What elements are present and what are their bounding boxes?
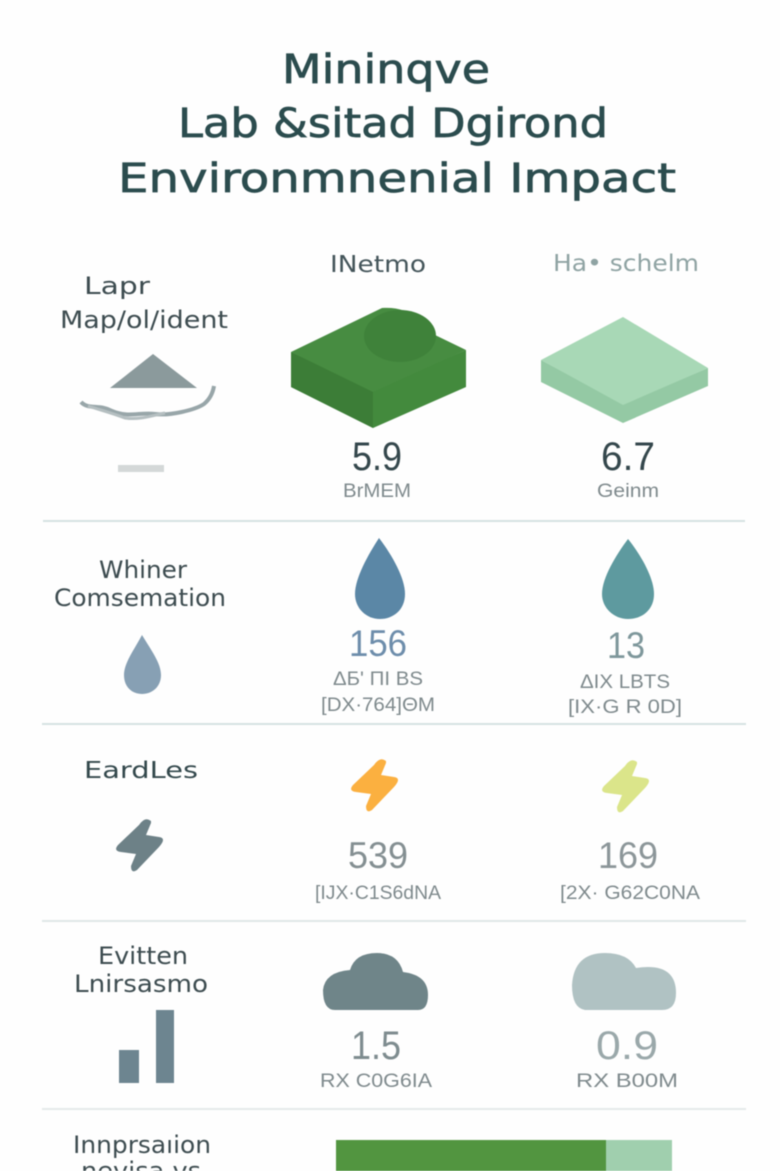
- stat: mined energy: 539: [348, 835, 408, 876]
- panel: impression row: [73, 1131, 672, 1171]
- row label: water: [54, 556, 226, 612]
- panel: water row: [54, 538, 682, 718]
- stat: mined water: [DX·764]ΘM: [321, 695, 435, 716]
- bar: share comparison: [336, 1140, 672, 1171]
- icon: small bolt: [116, 819, 163, 871]
- row label: impression: [73, 1131, 211, 1171]
- stat: lab water: 13: [607, 625, 645, 666]
- stat: lab water: [568, 625, 682, 718]
- icon: lab-grown land block: [541, 317, 708, 423]
- row label: emissions: Evitten: [98, 942, 188, 970]
- stat: lab emissions: 0.9: [596, 1024, 658, 1068]
- stat: lab water: [IX·G R 0D]: [568, 697, 682, 718]
- stat: lab land: 6.7: [601, 435, 655, 479]
- stat: mined emissions: [320, 1024, 432, 1092]
- icon: mountain and land: [81, 354, 214, 472]
- stat: lab emissions: [576, 1024, 678, 1092]
- stat: lab land: [597, 435, 659, 502]
- stat: mined water: 156: [349, 623, 407, 664]
- icon: mined water drop: [355, 538, 405, 619]
- icon: water drop small: [124, 635, 161, 694]
- stat: mined water: [321, 623, 435, 716]
- stat: lab water: ΔIX LBTS: [580, 672, 670, 693]
- divider: [42, 723, 746, 725]
- panel: energy row: [84, 758, 700, 904]
- title: Lab &sitad Dgirond: [178, 101, 608, 147]
- row label: impression: Innprsaıion: [73, 1131, 211, 1159]
- column heading: mined: INetmo: [330, 252, 426, 278]
- stat: mined water: ΔБ' ΠI ΒS: [333, 669, 423, 690]
- divider: [43, 520, 745, 522]
- row label: water: Comsemation: [54, 584, 226, 612]
- stat: lab emissions: RX B00M: [576, 1071, 678, 1092]
- stat: lab energy: [2X· G62C0NA: [560, 883, 700, 904]
- divider: [42, 920, 746, 922]
- icon: lab energy bolt: [602, 760, 649, 812]
- row label: land: [60, 272, 228, 334]
- stat: mined land: 5.9: [352, 435, 402, 479]
- stat: mined emissions: 1.5: [351, 1024, 401, 1068]
- panel: land row: [60, 272, 708, 502]
- stat: lab land: Geinm: [597, 481, 659, 502]
- icon: lab cloud: [572, 953, 676, 1010]
- row label: land: Map/ol/ident: [60, 306, 228, 334]
- title: Environmnenial Impact: [118, 156, 676, 202]
- column heading: lab-grown: Ha• schelm: [553, 251, 699, 277]
- stat: mined land: [343, 435, 411, 502]
- row label: water: Whiner: [99, 556, 187, 584]
- divider: [42, 1108, 746, 1110]
- stat: mined land: BrMEM: [343, 481, 411, 502]
- title: [118, 47, 676, 202]
- row label: land: Lapr: [84, 272, 150, 300]
- stat: lab energy: 169: [598, 835, 658, 876]
- row label: energy: EardLes: [84, 758, 198, 784]
- title: Mininqve: [282, 47, 490, 93]
- row label: emissions: [74, 942, 208, 998]
- icon: bars: [119, 1010, 174, 1083]
- row label: emissions: Lnirsasmo: [74, 970, 208, 998]
- icon: mined energy bolt: [351, 759, 398, 811]
- stat: mined emissions: RX C0G6IA: [320, 1071, 432, 1092]
- stat: mined energy: [IJX·C1S6dNA: [315, 883, 441, 904]
- panel: emissions row: [74, 942, 678, 1092]
- icon: mined cloud: [323, 953, 428, 1010]
- stat: lab energy: [560, 835, 700, 904]
- stat: mined energy: [315, 835, 441, 904]
- icon: mined land block: [291, 308, 466, 428]
- icon: lab water drop: [602, 539, 654, 619]
